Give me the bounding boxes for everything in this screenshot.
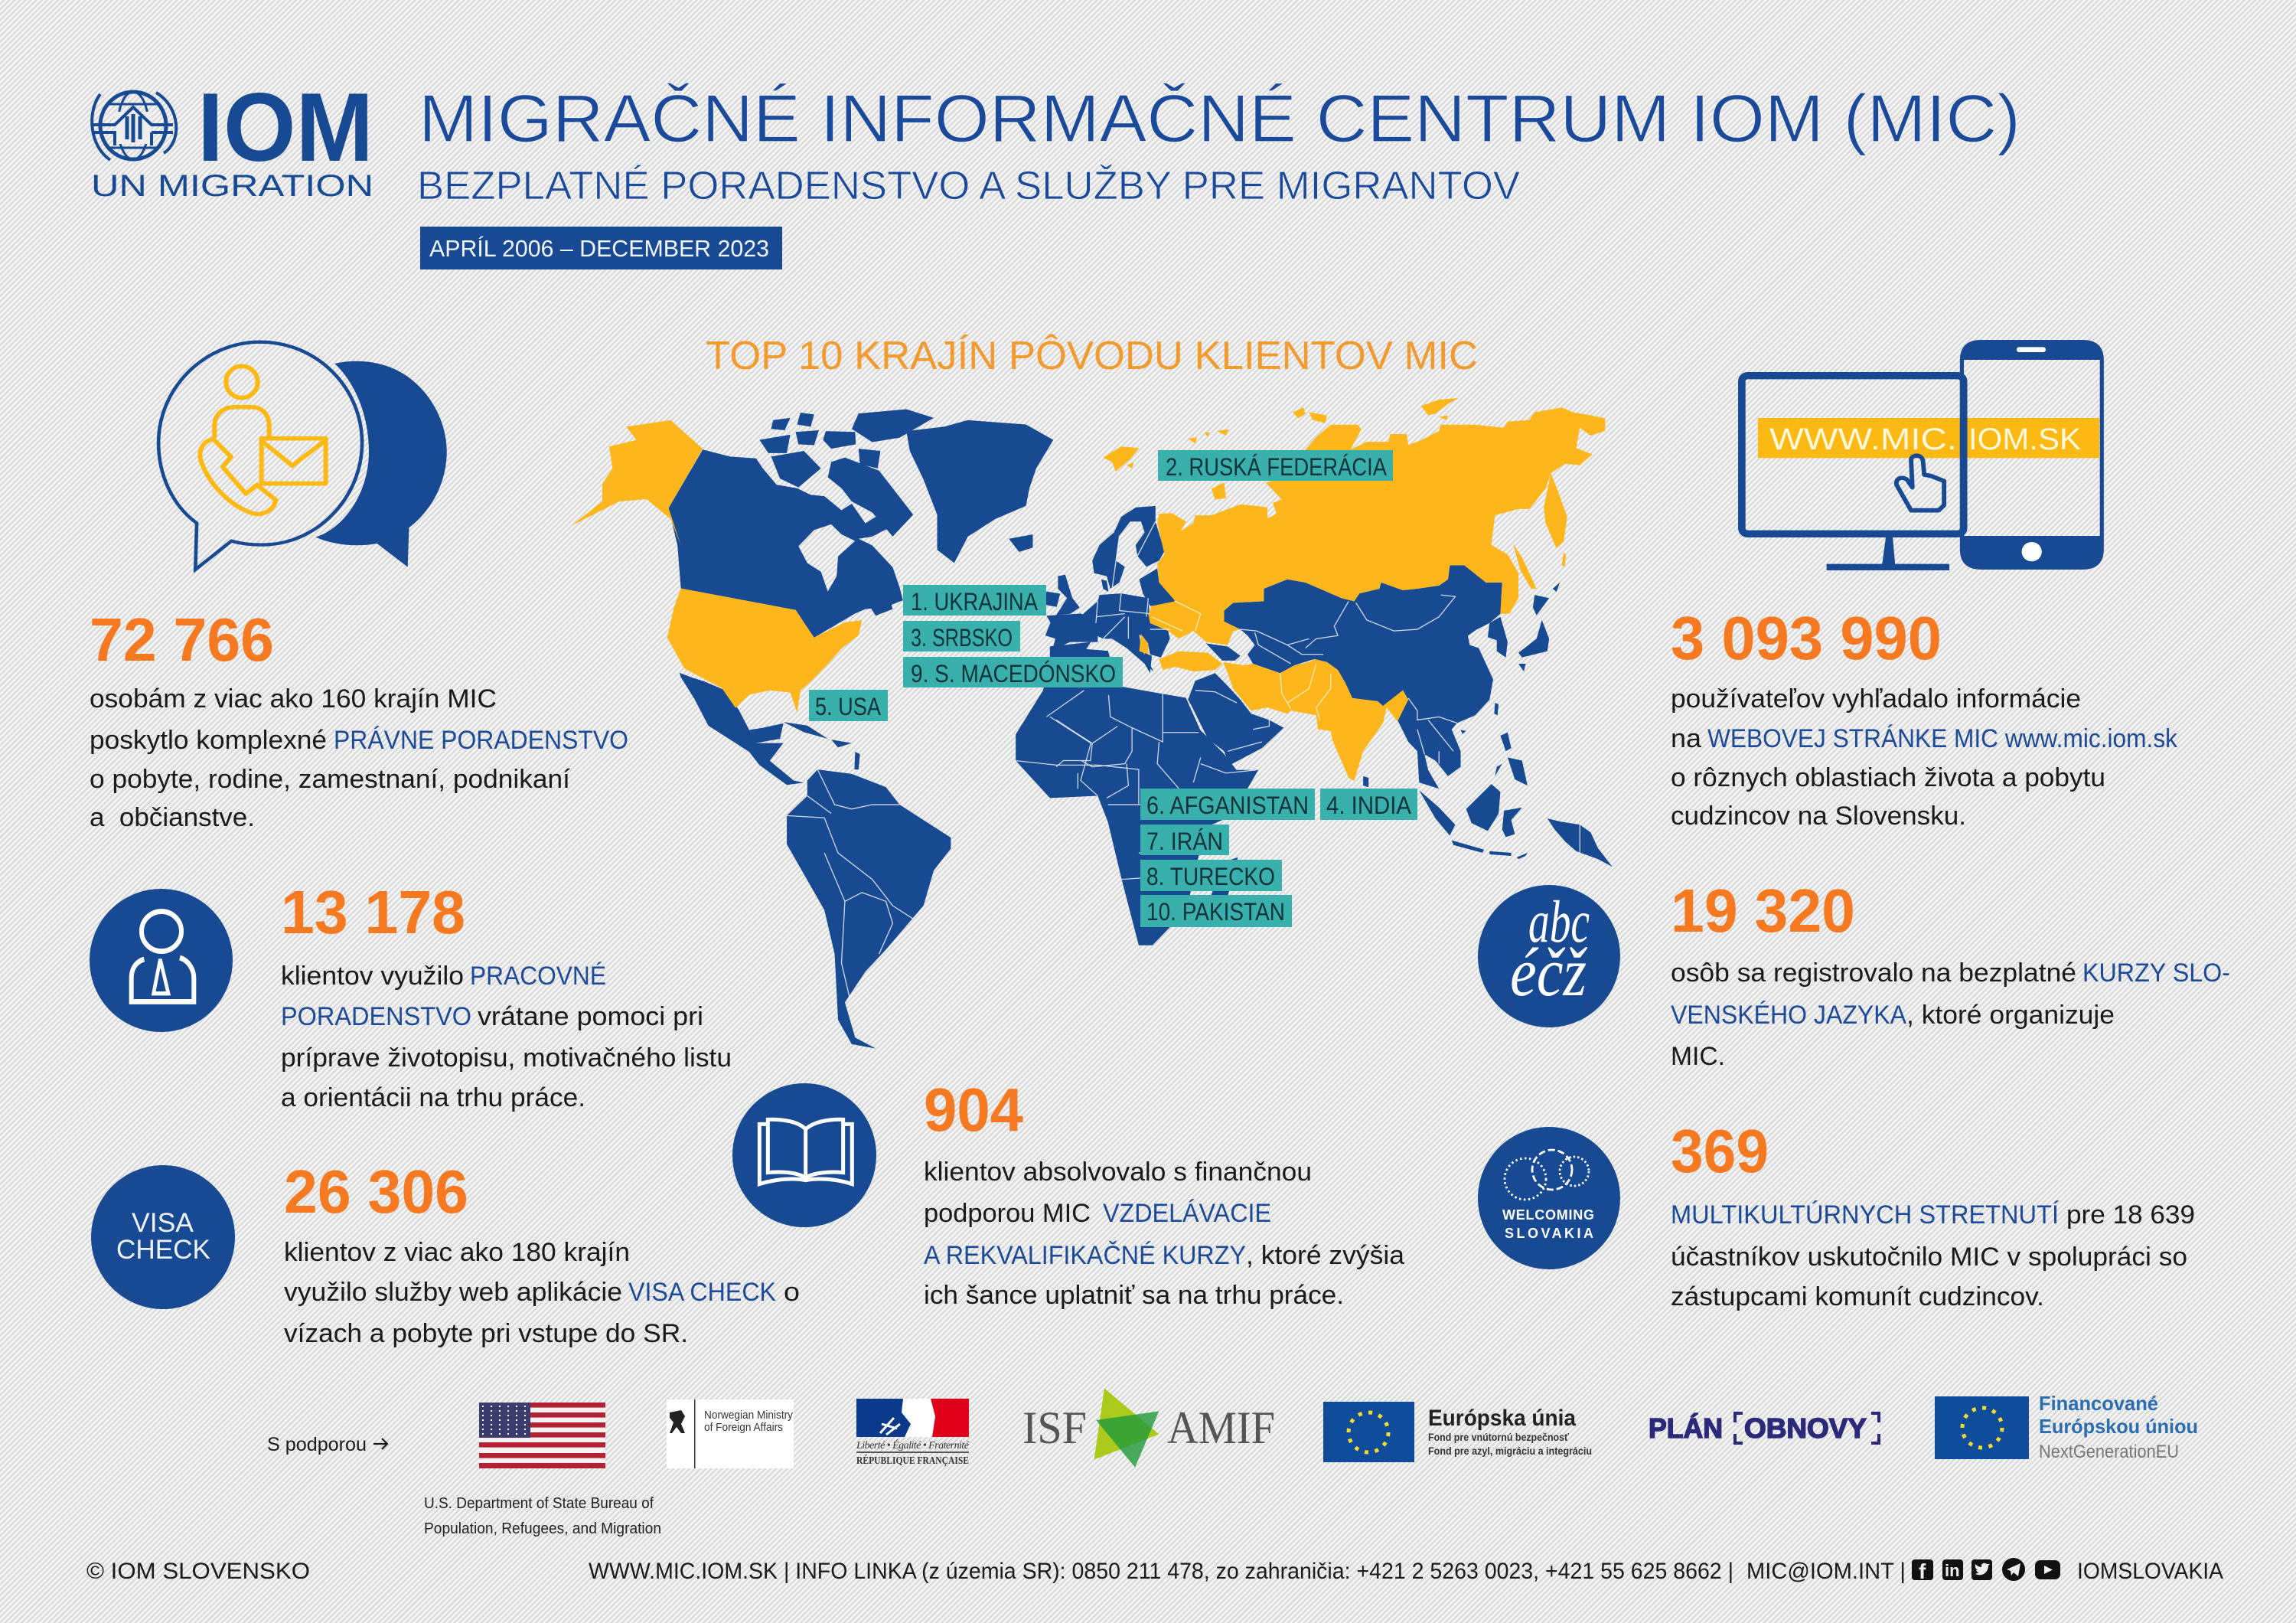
label: 7. Irán: 7. IRÁN: [1146, 828, 1223, 855]
text block: WEBOVEJ STRÁNKE MIC www.mic.iom.sk: [1707, 724, 2178, 753]
text block: zástupcami komunít cudzincov.: [1671, 1282, 2044, 1311]
text block: príprave životopisu, motivačného listu: [281, 1043, 732, 1073]
map: Asia: [1224, 565, 1502, 789]
panel: multicultural events: [1671, 1117, 2195, 1311]
text block: ich šance uplatniť sa na trhu práce.: [924, 1281, 1344, 1310]
map: Europe: [1045, 593, 1170, 671]
website text in icon: IOM.SK: [1968, 423, 2081, 456]
text block: [284, 1238, 800, 1348]
icon: Welcoming Slovakia: WELCOMING: [1502, 1207, 1594, 1223]
text block: KURZY SLO-: [2082, 958, 2230, 988]
text block: [1671, 958, 2230, 1071]
logo: IOM UN Migration: UN MIGRATION: [91, 169, 373, 203]
text block: MIC.: [1671, 1042, 1725, 1071]
map: yellow Eurasian countries: [1103, 398, 1605, 781]
panel: visa check: [284, 1158, 800, 1348]
text block: vízach a pobyte pri vstupe do SR.: [284, 1319, 688, 1348]
icon: monitor and phone with website: [1742, 340, 2104, 570]
heading: top 10 countries: TOP 10 KRAJÍN PÔVODU KLIENTOV MIC: [706, 334, 1478, 378]
text: copyright: © IOM SLOVENSKO: [86, 1559, 310, 1584]
label: 2. Ruská federácia: 2. RUSKÁ FEDERÁCIA: [1166, 453, 1388, 481]
text block: A REKVALIFIKAČNÉ KURZY: [924, 1241, 1246, 1270]
label: 5. USA: 5. USA: [815, 693, 882, 720]
label: 9. S. Macedónsko: 9. S. MACEDÓNSKO: [911, 660, 1116, 687]
text: supported by: S podporou: [267, 1434, 367, 1455]
logo: EU funds: Európska únia: [1428, 1406, 1576, 1431]
text block: klientov využilo: [281, 962, 464, 991]
text: US department: Population, Refugees, and Migration: [424, 1520, 661, 1537]
date badge: APRÍL 2006 – DECEMBER 2023: [429, 235, 769, 262]
icon: handwritten letters: éčž: [1510, 935, 1588, 1011]
logo: EU funds: [1323, 1402, 1592, 1462]
world map: [572, 398, 1613, 1049]
text block: vrátane pomoci pri: [478, 1002, 703, 1031]
text block: PRACOVNÉ: [470, 962, 606, 991]
text block: klientov absolvovalo s finančnou: [924, 1158, 1312, 1187]
text block: na: [1671, 724, 1701, 753]
number: 72 766: 72 766: [90, 606, 274, 674]
text block: [924, 1158, 1404, 1310]
text block: VENSKÉHO JAZYKA: [1671, 1001, 1906, 1030]
logo: NextGenerationEU: Európskou úniou: [2039, 1415, 2198, 1438]
map: American borders: [787, 691, 1207, 1007]
map: Eurasian and African borders: [1056, 521, 1580, 857]
icon: visa check: [91, 1165, 235, 1309]
icon: visa check: VISA: [132, 1208, 194, 1238]
number: 13 178: 13 178: [281, 878, 465, 946]
logo: US flag: [479, 1403, 605, 1468]
map: Greenland and Iceland: [906, 420, 1053, 563]
text block: VZDELÁVACIE: [1103, 1199, 1271, 1228]
number: 904: 904: [924, 1076, 1023, 1144]
map: Arabia: [1188, 673, 1283, 766]
text block: osobám z viac ako 160 krajín MIC: [90, 684, 497, 714]
icon: Welcoming Slovakia: [1478, 1127, 1620, 1269]
text: US department: [424, 1495, 661, 1537]
logo: EU funds: Fond pre vnútornú bezpečnosť: [1428, 1431, 1569, 1443]
text block: o rôznych oblastiach života a pobytu: [1671, 763, 2105, 792]
logo: ISF AMIF: [1022, 1388, 1275, 1468]
text block: a orientácii na trhu práce.: [281, 1083, 585, 1112]
text: email: MIC@IOM.INT |: [1746, 1559, 1906, 1584]
icon: IOM globe: [92, 92, 176, 160]
text block: MULTIKULTÚRNYCH STRETNUTÍ: [1671, 1200, 2060, 1229]
text block: osôb sa registrovalo na bezplatné: [1671, 958, 2076, 988]
text block: [1671, 684, 2178, 831]
text block: PORADENSTVO: [281, 1002, 471, 1031]
text block: a občianstve.: [90, 803, 255, 832]
text block: klientov z viac ako 180 krajín: [284, 1238, 630, 1267]
logo: Plán obnovy: PLÁN: [1649, 1412, 1723, 1444]
logo: NextGenerationEU: [1935, 1392, 2198, 1462]
logo: Norwegian ministry: of Foreign Affairs: [704, 1421, 783, 1434]
logo: French Republic: Liberté • Égalité • Fraternité: [856, 1438, 970, 1452]
text block: , ktoré zvýšia: [1246, 1241, 1404, 1270]
label: 8. Turecko: 8. TURECKO: [1146, 863, 1275, 890]
map: Americas and Africa: [572, 409, 1258, 1049]
icon: social media: in: [1945, 1561, 1960, 1580]
number: 369: 369: [1671, 1117, 1769, 1185]
label: 10. Pakistan: 10. PAKISTAN: [1146, 898, 1285, 926]
text block: používateľov vyhľadalo informácie: [1671, 684, 2081, 714]
panel: job counselling: [281, 878, 732, 1112]
icon: person with tie: [90, 889, 233, 1032]
map: Africa: [1016, 646, 1258, 945]
logo: Norwegian ministry: [667, 1399, 794, 1468]
number: 26 306: 26 306: [284, 1158, 468, 1226]
icon: handwritten letters: [1478, 885, 1620, 1027]
text block: , ktoré organizuje: [1906, 1001, 2115, 1030]
logo: Plán obnovy: [1649, 1412, 1879, 1444]
text block: využilo služby web aplikácie: [284, 1278, 622, 1307]
map labels: [809, 450, 1417, 927]
footer: [86, 1558, 2223, 1584]
text block: pre 18 639: [2066, 1200, 2195, 1229]
map: France, Iberia, Ireland: [1045, 592, 1097, 673]
label: 4. India: 4. INDIA: [1326, 792, 1412, 819]
text: social handle: IOMSLOVAKIA: [2077, 1559, 2223, 1584]
date badge: [420, 227, 782, 269]
logo: French Republic: [856, 1399, 970, 1467]
text block: podporou MIC: [924, 1199, 1091, 1228]
text block: o pobyte, rodine, zamestnaní, podnikaní: [90, 765, 571, 794]
map: Scandinavia: [1092, 506, 1165, 589]
text block: [281, 962, 732, 1112]
number: 19 320: 19 320: [1671, 877, 1855, 945]
icon: open book: [732, 1083, 876, 1227]
panel: website users: [1671, 604, 2178, 831]
label: 3. Srbsko: 3. SRBSKO: [911, 624, 1013, 651]
text: contact line: WWW.MIC.IOM.SK | INFO LINKA (z územia SR): 0850 211 478, zo zahraničia: +421 2 5263 0023, +421 55 625 8662 |: [589, 1559, 1733, 1584]
panel: courses: [924, 1076, 1404, 1310]
logo: Norwegian ministry: Norwegian Ministry: [704, 1409, 793, 1422]
label: 1. Ukrajina: 1. UKRAJINA: [911, 588, 1039, 616]
icon: social media: [1912, 1558, 2060, 1583]
logo: NextGenerationEU: NextGenerationEU: [2039, 1442, 2179, 1462]
icon: speech bubbles with phone and mail: [158, 342, 447, 570]
map: borders in yellow countries: [1152, 601, 1331, 720]
website text in icon: WWW.MIC.: [1769, 423, 1957, 456]
logo: Plán obnovy: OBNOVY: [1744, 1412, 1867, 1444]
logo: IOM UN Migration: [91, 73, 373, 203]
logo: NextGenerationEU: Financované: [2039, 1392, 2158, 1415]
icon: handwritten letters: abc: [1528, 888, 1590, 955]
map: Alaska and USA: [572, 420, 862, 712]
panel: language courses: [1671, 877, 2230, 1071]
panel: legal counselling: [90, 606, 628, 832]
text block: PRÁVNE PORADENSTVO: [334, 726, 628, 755]
icon: Welcoming Slovakia: SLOVAKIA: [1505, 1226, 1593, 1241]
logo: IOM UN Migration: IOM: [197, 73, 373, 181]
title: MIGRAČNÉ INFORMAČNÉ CENTRUM IOM (MIC): [419, 80, 2020, 156]
label: 6. Afganistan: 6. AFGANISTAN: [1146, 792, 1309, 819]
text block: o: [784, 1278, 800, 1307]
text block: VISA CHECK: [628, 1278, 776, 1307]
map: Eurasia: [1045, 398, 1613, 867]
text block: účastníkov uskutočnilo MIC v spolupráci so: [1671, 1243, 2187, 1272]
icon: visa check: CHECK: [116, 1235, 210, 1265]
text block: poskytlo komplexné: [90, 726, 327, 755]
logo: French Republic: RÉPUBLIQUE FRANÇAISE: [856, 1454, 969, 1467]
icon: social media: f: [1919, 1559, 1926, 1583]
logo: ISF AMIF: AMIF: [1167, 1403, 1275, 1453]
text block: cudzincov na Slovensku.: [1671, 802, 1966, 831]
sponsors row: [267, 1388, 2198, 1537]
text block: [90, 684, 628, 832]
map: South America: [787, 769, 951, 1049]
number: 3 093 990: 3 093 990: [1671, 604, 1942, 672]
subtitle: BEZPLATNÉ PORADENSTVO A SLUŽBY PRE MIGRANTOV: [417, 164, 1520, 208]
logo: EU funds: Fond pre azyl, migráciu a integráciu: [1428, 1445, 1592, 1457]
text block: [1671, 1200, 2195, 1311]
logo: ISF AMIF: ISF: [1022, 1403, 1087, 1453]
text: US department: U.S. Department of State Bureau of: [424, 1495, 654, 1512]
website text in icon: [1769, 423, 2081, 456]
